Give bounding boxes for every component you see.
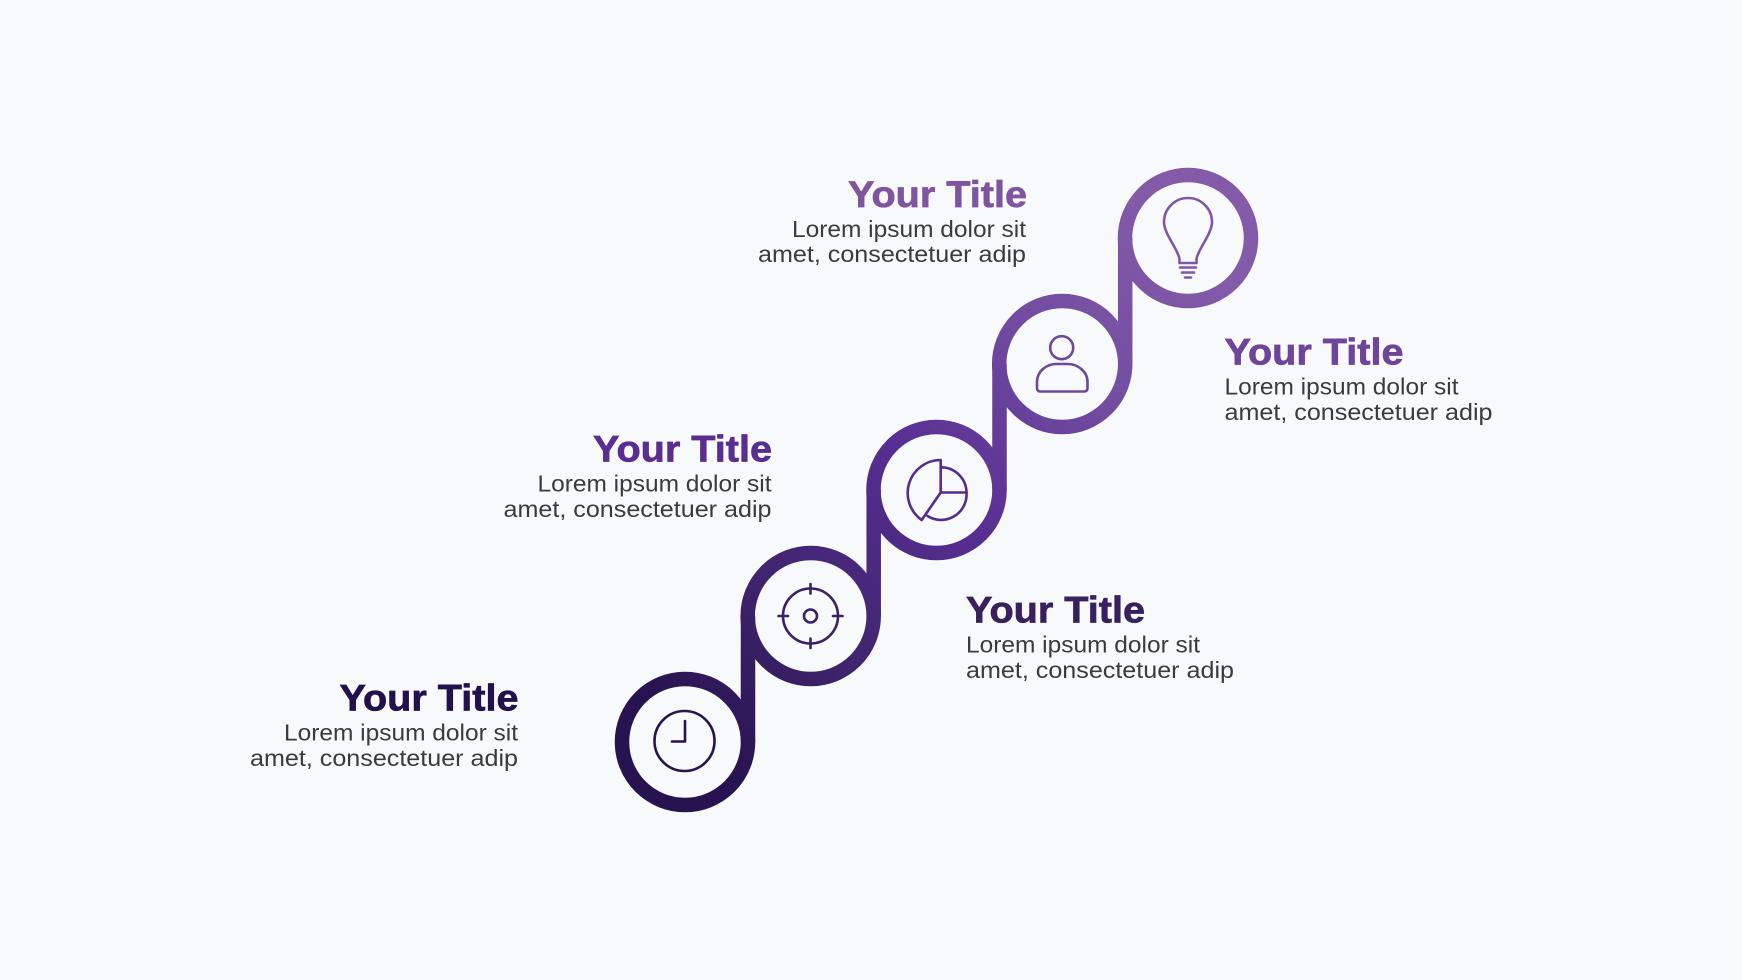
connector 4 to 5	[1118, 238, 1132, 364]
icon: clock	[654, 711, 714, 771]
description 5: amet, consectetuer adip	[758, 241, 1026, 267]
description 4: Lorem ipsum dolor sit	[1224, 374, 1459, 400]
icon: person	[1037, 336, 1088, 392]
description 1	[250, 720, 519, 771]
description 2: Lorem ipsum dolor sit	[966, 632, 1201, 658]
text block 5: top	[758, 174, 1027, 267]
title 3: Your Title	[593, 428, 772, 470]
ring 3	[874, 427, 1000, 553]
description 4: amet, consectetuer adip	[1224, 399, 1492, 425]
icon: light bulb	[1164, 198, 1212, 278]
title 4: Your Title	[1224, 332, 1404, 372]
stepped chain of rings	[622, 175, 1251, 805]
text block 1: left	[250, 678, 519, 771]
ring 5	[1125, 175, 1251, 301]
description 3	[504, 470, 772, 522]
connector 2 to 3	[866, 490, 881, 616]
description 2	[966, 632, 1234, 683]
text block 2: right	[966, 590, 1234, 683]
description 5: Lorem ipsum dolor sit	[792, 216, 1027, 242]
ring 2	[748, 553, 874, 679]
icon: target	[778, 584, 842, 648]
description 2: amet, consectetuer adip	[966, 657, 1234, 683]
title 1: Your Title	[340, 678, 518, 718]
icon: pie chart	[908, 460, 967, 520]
description 1: Lorem ipsum dolor sit	[284, 720, 519, 746]
description 3: Lorem ipsum dolor sit	[538, 470, 772, 496]
title 5: Your Title	[848, 174, 1027, 215]
ring 4	[999, 301, 1125, 427]
ring 1	[622, 679, 748, 805]
description 1: amet, consectetuer adip	[250, 745, 518, 771]
title 2: Your Title	[966, 590, 1145, 630]
text block 4: right	[1224, 332, 1492, 425]
description 5	[758, 216, 1027, 267]
text block 3: left	[504, 428, 772, 522]
description 3: amet, consectetuer adip	[504, 496, 772, 522]
connector 1 to 2	[741, 616, 755, 742]
description 4	[1224, 374, 1492, 425]
connector 3 to 4	[992, 364, 1007, 490]
